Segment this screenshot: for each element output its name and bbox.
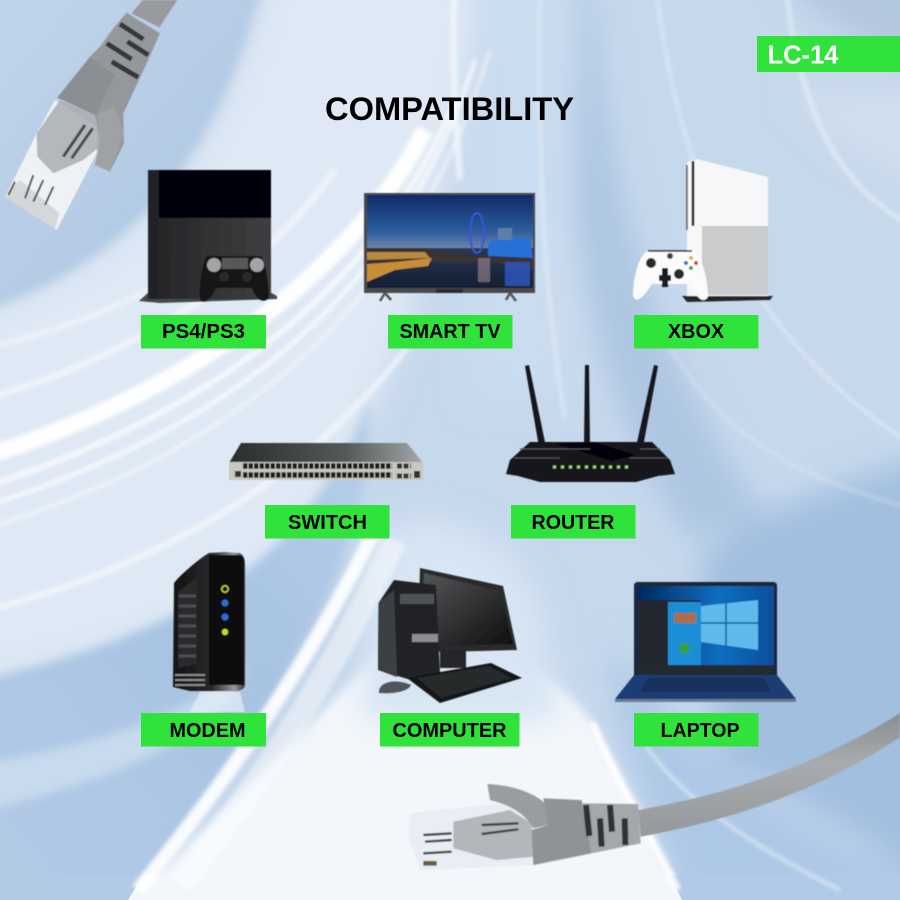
device: laptop [615, 582, 796, 702]
label: SWITCH [265, 505, 390, 538]
device: Xbox console and controller [633, 159, 773, 302]
device: smart TV [364, 193, 535, 301]
label: COMPUTER: COMPUTER [392, 720, 507, 742]
label: PS4/PS3 [141, 315, 266, 348]
badge: LC-14 [757, 36, 900, 72]
label: MODEM: MODEM [170, 720, 246, 742]
title: COMPATIBILITY [325, 91, 574, 127]
label: ROUTER [511, 505, 636, 538]
device: desktop computer [378, 568, 522, 703]
cable: bottom RJ45 connector with gray lead [408, 713, 900, 870]
label: SMART TV: SMART TV [400, 321, 501, 343]
label: SMART TV [388, 315, 512, 348]
label: XBOX [634, 315, 758, 348]
device: PS4 console and controller [139, 170, 277, 303]
label: ROUTER: ROUTER [532, 512, 615, 534]
label: LAPTOP: LAPTOP [660, 720, 740, 742]
label: LAPTOP [634, 713, 758, 746]
device: network switch [229, 443, 423, 480]
label: MODEM [141, 713, 266, 746]
label: COMPUTER [380, 713, 520, 746]
label: XBOX: XBOX [668, 321, 725, 343]
cable: top-left RJ45 connector [5, 0, 177, 230]
device: wireless router [506, 365, 675, 482]
label: SWITCH: SWITCH [288, 512, 367, 534]
label: PS4/PS3: PS4/PS3 [162, 321, 245, 343]
boot [57, 13, 160, 172]
device: cable modem [173, 552, 245, 712]
transparent plug [5, 100, 97, 230]
badge: LC-14: LC-14 [768, 42, 839, 70]
